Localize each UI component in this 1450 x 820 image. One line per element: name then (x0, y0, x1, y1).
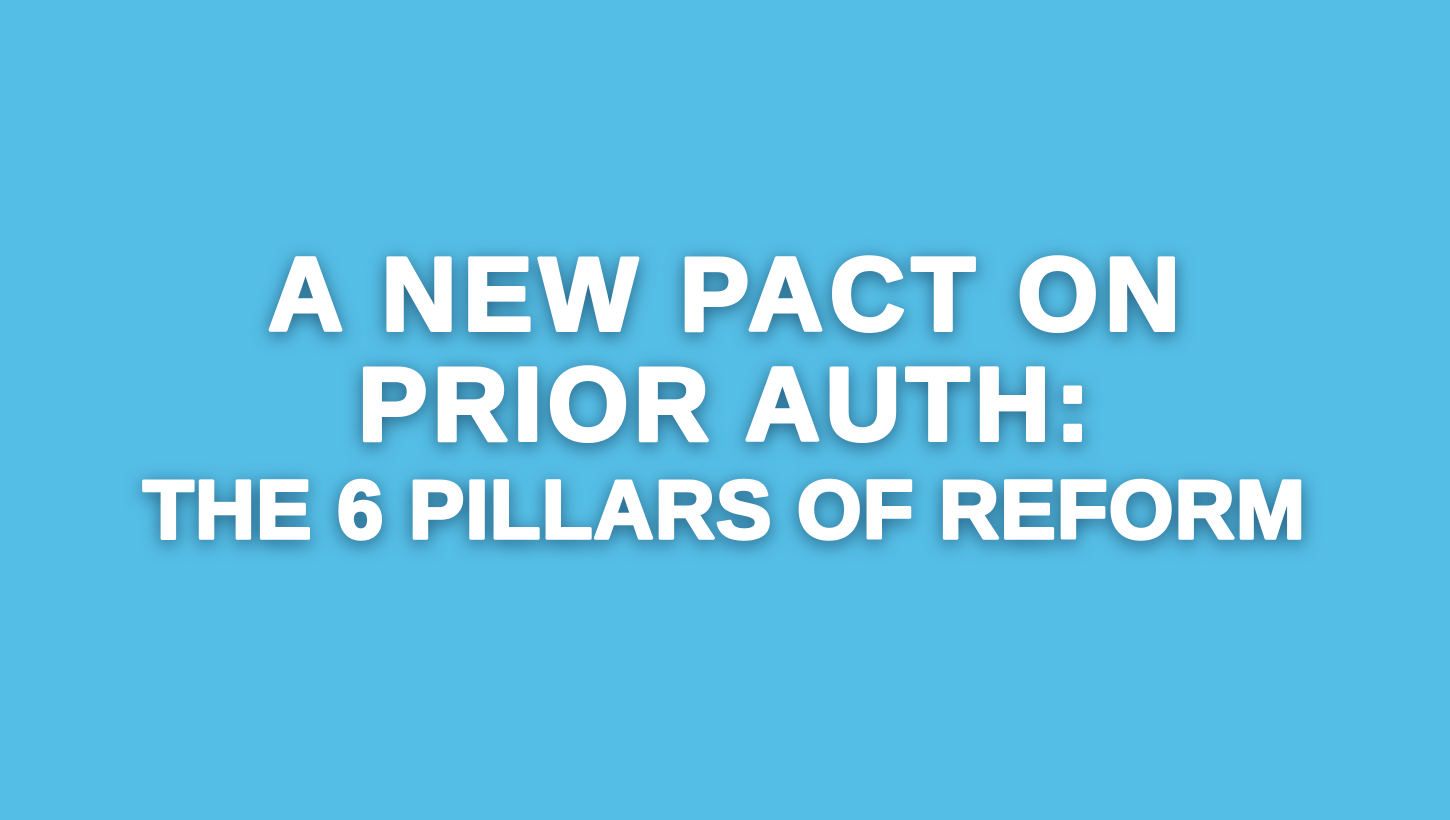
title (143, 237, 1305, 556)
title line 2: PRIOR AUTH: (358, 347, 1090, 463)
subtitle line: THE 6 PILLARS OF REFORM (143, 463, 1305, 556)
title line 1: A NEW PACT ON (268, 237, 1180, 353)
